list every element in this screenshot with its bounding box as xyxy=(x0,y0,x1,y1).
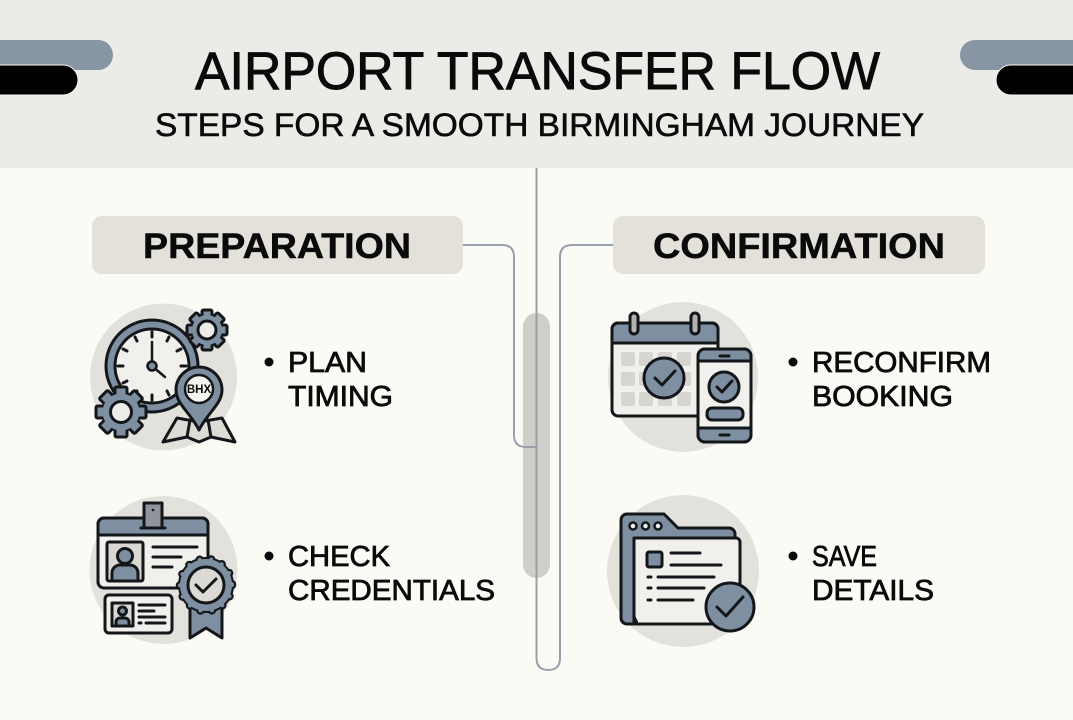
folded map xyxy=(163,418,235,442)
small ID card xyxy=(105,595,172,633)
section heading: preparation: PREPARATION xyxy=(143,227,411,266)
text: save details: SAVE xyxy=(812,541,877,573)
title: AIRPORT TRANSFER FLOW xyxy=(195,42,880,101)
icon: folder document with check xyxy=(607,495,759,647)
text: save details xyxy=(788,541,934,607)
text: plan timing: TIMING xyxy=(288,381,393,413)
approval badge xyxy=(178,557,234,638)
text: check credentials: CREDENTIALS xyxy=(288,575,495,607)
icon: ID cards and approval badge xyxy=(90,496,238,644)
text: plan timing: PLAN xyxy=(288,347,367,379)
icon: calendar and phone confirmation xyxy=(608,302,758,452)
header band xyxy=(0,0,1073,168)
decorative bars right xyxy=(960,40,1073,95)
text: check credentials xyxy=(264,541,495,607)
text: save details: DETAILS xyxy=(812,575,934,607)
text: reconfirm booking xyxy=(788,347,991,413)
icon: clock, gears and BHX map pin xyxy=(90,304,237,450)
text: plan timing xyxy=(264,347,393,413)
text: reconfirm booking: BOOKING xyxy=(812,381,953,413)
icon: clock, gears and BHX map pin: BHX xyxy=(187,384,211,396)
map pin xyxy=(176,367,222,430)
phone xyxy=(698,349,751,442)
section heading: confirmation: CONFIRMATION xyxy=(653,227,945,266)
decorative bars left xyxy=(0,40,113,95)
subtitle: STEPS FOR A SMOOTH BIRMINGHAM JOURNEY xyxy=(155,107,924,143)
section heading: preparation xyxy=(92,216,463,274)
gear bottom left xyxy=(96,387,146,437)
text: reconfirm booking: RECONFIRM xyxy=(812,347,991,379)
section heading: confirmation xyxy=(613,216,985,274)
text: check credentials: CHECK xyxy=(288,541,391,573)
central flow spine and connectors xyxy=(463,168,613,670)
gear top right xyxy=(187,310,227,350)
